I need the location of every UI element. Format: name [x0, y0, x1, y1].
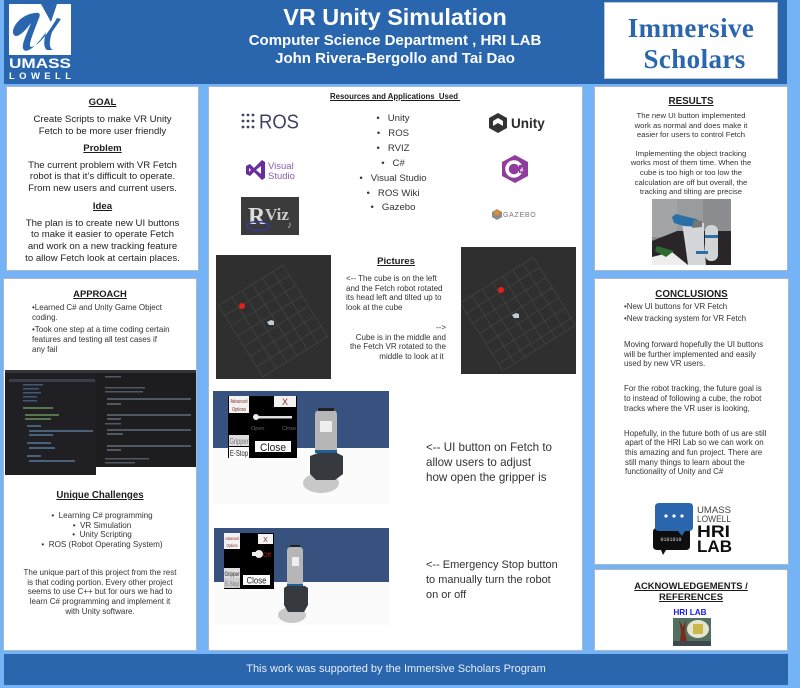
icon: Visual Studio logo — [246, 160, 295, 182]
heading: resources: Resources and Applications Used — [330, 92, 458, 101]
panel: approach and challenges — [4, 279, 196, 650]
panel: results — [595, 87, 787, 270]
caption: cube in middle: --> — [436, 323, 446, 332]
challenges text: learn C# programming and implement it — [30, 597, 170, 606]
heading: unique challenges: Unique Challenges — [56, 490, 144, 501]
conclusions text: to instead of following a cube, the robot — [624, 394, 761, 403]
challenges text: with Unity software. — [65, 607, 135, 616]
icon: UMass Lowell HRI Lab logo: 0101010 — [660, 537, 682, 543]
conclusions text: tracks where the VR user is looking, — [624, 404, 750, 413]
conclusions text — [624, 302, 766, 476]
challenges list — [41, 511, 163, 549]
footer text: This work was supported by the Immersive Scholars Program — [246, 663, 546, 675]
heading: problem: Problem — [83, 143, 122, 154]
picture: gripper UI: Close — [260, 442, 286, 454]
idea text — [25, 218, 180, 264]
resources list: • Gazebo — [371, 202, 415, 213]
challenges text: is that coding portion. Every other project — [27, 578, 173, 587]
heading: acknowledgements — [634, 580, 748, 602]
goal text — [33, 114, 172, 137]
results text: easier for users to control Fetch — [637, 130, 745, 139]
goal text: Create Scripts to make VR Unity — [33, 114, 172, 125]
challenges text — [24, 568, 176, 616]
conclusions text: Hopefully, in the future both of us are still — [624, 429, 766, 438]
problem text: The current problem with VR Fetch — [28, 160, 177, 170]
heading: goal: GOAL — [89, 97, 116, 108]
caption: UI button: how open the gripper is — [426, 470, 547, 484]
picture: gripper UI: Advanced — [230, 399, 248, 405]
caption: cube on left: <-- The cube is on the left — [346, 274, 437, 283]
heading: idea: Idea — [93, 201, 112, 212]
approach bullets: coding. — [32, 313, 58, 322]
icon: Gazebo logo — [492, 209, 536, 220]
icon: Visual Studio logo: Studio — [268, 171, 295, 182]
icon: ROS logo — [242, 112, 299, 134]
caption: UI button: allow users to adjust — [426, 456, 531, 468]
conclusions text: will be further implemented and easily — [624, 350, 756, 359]
problem text: From new users and current users. — [28, 183, 177, 194]
approach bullets: features and testing all test cases if — [32, 335, 157, 344]
icon: Unity logo: Unity — [511, 116, 545, 131]
conclusions text: Moving forward hopefully the UI buttons — [624, 340, 763, 349]
results text: The new UI button implemented — [637, 111, 745, 120]
results text: work as normal and does make it — [635, 121, 747, 130]
problem text: robot is that it’s difficult to operate. — [30, 171, 175, 182]
idea text: The plan is to create new UI buttons — [26, 218, 179, 228]
panel: acknowledgements — [595, 570, 787, 650]
heading: acknowledgements: ACKNOWLEDGEMENTS / — [634, 580, 748, 590]
caption: emergency stop: to manually turn the robot — [426, 574, 551, 586]
approach bullets: any fail — [32, 344, 57, 354]
picture: gripper UI: Close — [282, 426, 296, 432]
challenges list: • VR Simulation — [73, 521, 131, 530]
resources list: • Unity — [376, 113, 410, 124]
resources list: • ROS — [377, 128, 409, 139]
idea text: to allow Fetch look at certain places. — [25, 253, 180, 264]
subtitle: authors: John Rivera-Bergollo and Tai Dao — [275, 50, 515, 67]
icon: UMass Lowell HRI Lab logo: HRI — [697, 522, 730, 541]
icon: UMass Lowell HRI Lab logo: LOWELL — [697, 514, 731, 525]
results text: works most of them time. When the — [631, 158, 751, 167]
picture: gripper UI: X — [282, 397, 288, 407]
idea text: and work on a new tracking feature — [28, 241, 177, 252]
picture: gripper UI: Open — [251, 426, 264, 432]
picture: gripper UI — [213, 391, 389, 504]
challenges text: The unique part of this project from the rest — [24, 568, 176, 577]
code editor screenshot — [5, 370, 196, 475]
picture: cube on the left — [216, 255, 331, 379]
heading: conclusions: CONCLUSIONS — [655, 289, 728, 300]
picture: HRI LAB thumbnail — [673, 618, 711, 646]
heading: approach: APPROACH — [73, 288, 127, 299]
panel: goal — [7, 87, 198, 270]
heading: results: RESULTS — [668, 96, 714, 107]
icon: RViz logo — [241, 197, 299, 235]
icon: UMass Lowell HRI Lab logo: UMASS — [697, 505, 731, 516]
conclusions text: used by new VR users. — [624, 359, 705, 368]
panel: conclusions — [595, 279, 788, 564]
header banner — [4, 0, 787, 84]
picture: emergency stop UI: Advanced — [225, 536, 239, 541]
icon: UMass Lowell logo: UMASS — [9, 56, 71, 71]
resources list: • ROS Wiki — [367, 188, 419, 199]
icon: RViz logo: Viz — [265, 205, 289, 224]
goal text: Fetch to be more user friendly — [39, 126, 166, 137]
icon: C# logo — [502, 155, 528, 183]
conclusions text: For the robot tracking, the future goal is — [624, 384, 762, 393]
icon: Gazebo logo: GAZEBO — [503, 212, 536, 219]
picture: emergency stop UI: Options — [226, 543, 238, 548]
resources list — [359, 113, 427, 213]
problem text — [28, 160, 177, 194]
title: VR Unity Simulation — [283, 4, 507, 30]
results text: tracking and tilting are precise — [640, 187, 742, 196]
subtitle: department: Computer Science Department , HRI LAB — [249, 32, 541, 49]
caption: cube on left — [346, 274, 443, 312]
conclusions text: functionality of Unity and C# — [625, 467, 723, 476]
caption: cube in middle: Cube is in the middle and — [356, 333, 446, 342]
icon: UMass Lowell HRI Lab logo — [653, 503, 732, 556]
picture: Fetch robot — [652, 199, 731, 265]
caption: emergency stop: <-- Emergency Stop button — [426, 558, 558, 570]
conclusions text: still many things to learn about the — [625, 458, 745, 467]
icon: UMass Lowell logo: LOWELL — [9, 71, 71, 82]
challenges list: • Unity Scripting — [72, 530, 132, 539]
conclusions text: this amazing and fun project. There are — [625, 448, 762, 457]
icon: C# logo: # — [520, 168, 524, 174]
Immersive Scholars wordmark: Immersive — [628, 13, 754, 43]
picture: gripper UI: E-Stop — [230, 449, 248, 458]
conclusions text: •New tracking system for VR Fetch — [624, 314, 746, 323]
caption: cube in middle: the Fetch VR rotated to the — [350, 342, 446, 351]
caption: cube in middle: middle to look at it — [379, 352, 444, 361]
results text: Implementing the object tracking — [636, 149, 746, 158]
resources list: • RVIZ — [376, 143, 410, 154]
picture: emergency stop UI: Close — [246, 576, 266, 586]
icon: UMass Lowell logo — [9, 4, 71, 82]
picture: emergency stop UI: Gripper — [224, 571, 240, 578]
picture: emergency stop UI: X — [263, 537, 268, 544]
footer banner — [4, 654, 788, 685]
challenges list: • Learning C# programming — [51, 511, 153, 520]
approach bullets: •Took one step at a time coding certain — [32, 325, 170, 334]
caption: cube on left: and the Fetch robot rotated — [346, 284, 443, 293]
caption: cube on left: its head left and tilted up to — [346, 293, 442, 302]
challenges list: • ROS (Robot Operating System) — [41, 540, 163, 549]
icon: Unity logo — [489, 113, 545, 133]
results text — [630, 111, 751, 196]
icon: UMass Lowell HRI Lab logo: LAB — [697, 537, 732, 556]
caption: UI button — [426, 440, 552, 484]
caption: emergency stop — [426, 558, 558, 600]
picture: emergency stop UI: Off — [263, 553, 271, 559]
results text: calculation are off but overall, the — [635, 178, 747, 187]
icon: ROS logo: ROS — [259, 112, 299, 134]
caption: cube in middle — [350, 323, 446, 361]
picture: cube in the middle — [461, 247, 576, 374]
conclusions text: •New UI buttons for VR Fetch — [624, 302, 727, 311]
conclusions text: apart of the HRI Lab so we can work on — [625, 438, 764, 447]
results text: cube is too high or too low the — [640, 168, 742, 177]
Immersive Scholars wordmark: Scholars — [643, 44, 746, 74]
caption: emergency stop: on or off — [426, 588, 466, 600]
icon: RViz logo: R — [248, 204, 266, 230]
approach bullets — [32, 303, 170, 354]
resources list: • C# — [381, 158, 405, 169]
heading: acknowledgements: REFERENCES — [659, 591, 723, 602]
approach bullets: •Learned C# and Unity Game Object — [32, 303, 162, 312]
picture: gripper UI: Options — [232, 407, 246, 413]
picture: emergency stop UI — [214, 528, 389, 625]
challenges text: seems to use C++ but for ours we had to — [28, 587, 172, 596]
caption: UI button: <-- UI button on Fetch to — [426, 440, 552, 454]
resources list: • Visual Studio — [359, 173, 427, 184]
panel: resources and pictures — [209, 87, 582, 650]
icon: RViz logo: ♪ — [287, 220, 292, 231]
Immersive Scholars box — [605, 3, 777, 78]
caption: cube on left: look at the cube — [346, 303, 402, 312]
picture: emergency stop UI: E-Stop — [225, 581, 239, 588]
Immersive Scholars wordmark — [628, 13, 754, 74]
heading: pictures: Pictures — [377, 256, 415, 267]
picture: gripper UI: Gripper — [230, 437, 249, 446]
icon: Visual Studio logo: Visual — [268, 161, 294, 172]
link: HRI LAB: HRI LAB — [673, 608, 707, 617]
idea text: to make it easier to operate Fetch — [31, 229, 174, 240]
